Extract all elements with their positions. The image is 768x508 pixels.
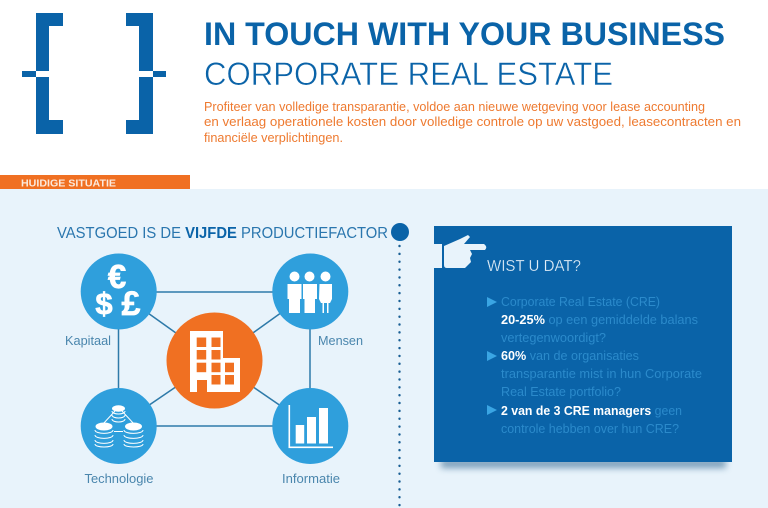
panel: wist u dat <box>434 226 732 468</box>
timeline dot <box>391 223 409 241</box>
node: Kapitaal icon: $ <box>95 286 113 321</box>
intro text <box>204 100 741 145</box>
section heading: VASTGOED IS DE VIJFDE PRODUCTIEFACTOR <box>57 225 388 242</box>
label: Mensen: Mensen <box>318 334 363 348</box>
title: IN TOUCH WITH YOUR BUSINESS <box>204 16 725 52</box>
bullet list: 2 van de 3 CRE managers geen <box>501 404 682 418</box>
bullet list: Real Estate portfolio? <box>501 385 621 399</box>
node: Kapitaal icon: € <box>108 258 126 295</box>
intro text: Profiteer van volledige transparantie, voldoe aan nieuwe wetgeving voor lease accounting <box>204 100 705 114</box>
subtitle: CORPORATE REAL ESTATE <box>204 56 613 92</box>
node: Mensen icon <box>272 254 348 330</box>
bullet list: controle hebben over hun CRE? <box>501 422 679 436</box>
node: Informatie icon <box>272 388 348 464</box>
icon: pointing hand <box>434 235 486 268</box>
bullet list: 20-25% op een gemiddelde balans <box>501 313 698 327</box>
dotted timeline <box>398 246 401 508</box>
bullet list: 60% van de organisaties <box>501 349 639 363</box>
node: Kapitaal icon: £ <box>122 285 141 323</box>
section tab <box>0 175 190 190</box>
bullet list: vertegenwoordigt? <box>501 331 606 345</box>
label: Informatie: Informatie <box>282 472 340 486</box>
intro text: en verlaag operationele kosten door volledige controle op uw vastgoed, leasecontracten en <box>204 115 741 129</box>
network connectors <box>118 292 310 426</box>
bullet list: Corporate Real Estate (CRE) <box>501 295 660 309</box>
intro text: financiële verplichtingen. <box>204 131 343 145</box>
label: Technologie: Technologie <box>84 472 154 486</box>
node: Kapitaal icon <box>81 254 157 330</box>
label: Kapitaal: Kapitaal <box>65 334 111 348</box>
logo: brackets <box>22 13 166 134</box>
node: Technologie icon <box>81 388 157 464</box>
panel heading: WIST U DAT? <box>487 258 581 275</box>
bullet list <box>487 295 702 436</box>
bullet list: transparantie mist in hun Corporate <box>501 367 702 381</box>
section tab: HUIDIGE SITUATIE <box>21 178 116 190</box>
central node: building icon <box>166 312 262 408</box>
